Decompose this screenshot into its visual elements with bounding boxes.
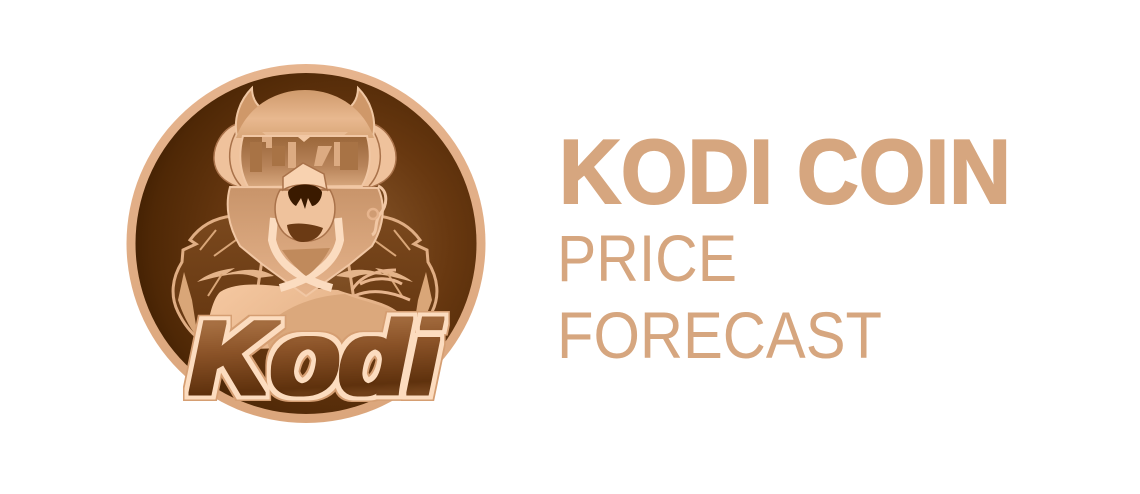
- Kodi logo lettering: Kodi: [190, 300, 441, 417]
- visor goggles: [240, 136, 370, 187]
- neck and collar: [228, 186, 386, 296]
- head dome: [236, 90, 374, 138]
- head bar: [262, 132, 348, 137]
- mouth: [287, 224, 323, 242]
- subheading: PRICE: PRICE: [557, 221, 737, 295]
- nose: [288, 184, 322, 209]
- bear mascot: [173, 88, 437, 350]
- coin disc: [126, 64, 486, 423]
- heading: KODI COIN: KODI COIN: [559, 122, 1011, 223]
- coin emblem: [126, 64, 486, 423]
- muzzle: [275, 163, 335, 242]
- title text: [557, 122, 1011, 372]
- crossed arms: [205, 270, 414, 350]
- subheading: FORECAST: FORECAST: [557, 298, 882, 372]
- fur jacket and headphones: [173, 88, 437, 340]
